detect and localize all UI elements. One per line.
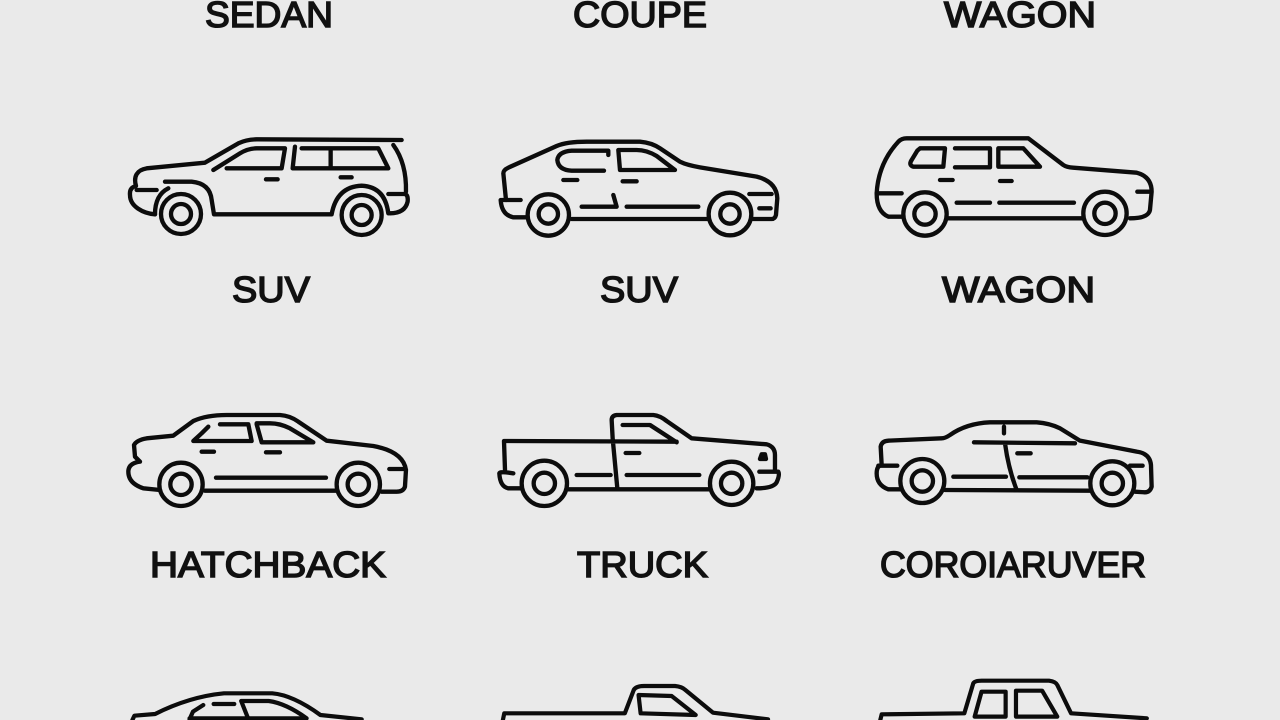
icon: SUV car middle	[501, 142, 777, 236]
icon: cropped pickup bottom row	[503, 686, 768, 720]
label: garbled convertible: COROIARUVER	[880, 544, 1146, 585]
icon: cropped crew-cab truck bottom row	[880, 681, 1147, 720]
icon: convertible car	[877, 422, 1152, 505]
icon: pickup truck	[499, 415, 779, 506]
icon: SUV car left	[130, 139, 408, 235]
label: WAGON: WAGON	[942, 269, 1095, 310]
icon: hatchback car	[128, 415, 406, 506]
label: SUV middle: SUV	[600, 269, 678, 310]
icon: cropped sedan bottom row	[132, 693, 362, 720]
label: TRUCK: TRUCK	[577, 544, 708, 585]
label: SUV left: SUV	[232, 269, 310, 310]
icon: wagon car	[877, 138, 1152, 236]
label: HATCHBACK: HATCHBACK	[150, 544, 386, 585]
